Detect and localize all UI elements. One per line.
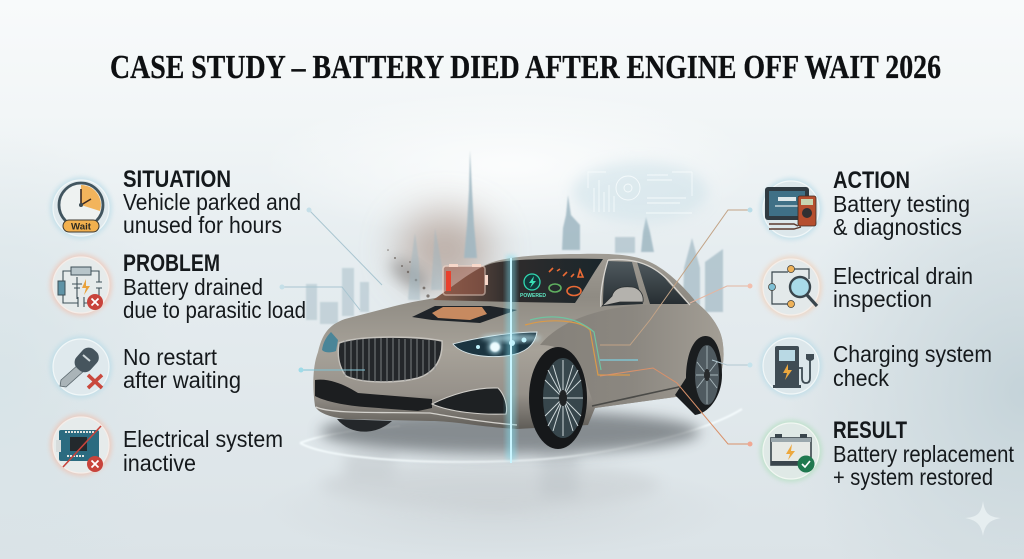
connector lines <box>280 208 752 446</box>
action text <box>833 167 970 240</box>
problem text: due to parasitic load <box>123 297 306 323</box>
action text: ACTION <box>833 167 910 194</box>
charging system text <box>833 341 992 391</box>
front wheel <box>529 347 587 449</box>
situation text <box>123 166 301 238</box>
lower left intake <box>315 380 432 411</box>
right headlight <box>453 332 537 357</box>
smoke and debris <box>386 212 491 298</box>
charging system text: check <box>833 365 889 391</box>
action text: Battery testing <box>833 191 970 217</box>
no restart text: No restart <box>123 344 218 370</box>
result text <box>833 417 1015 490</box>
situation: wait gauge icon <box>50 177 112 239</box>
situation text: Vehicle parked and <box>123 189 301 215</box>
action: diagnostics icon <box>760 178 822 240</box>
charging system text: Charging system <box>833 341 992 367</box>
vertical scan beam <box>481 255 541 463</box>
electrical drain inspection text <box>833 263 973 312</box>
sparkle mark <box>965 501 1001 536</box>
result text: + system restored <box>833 464 993 490</box>
side mirror <box>602 287 643 306</box>
problem text: Battery drained <box>123 274 263 300</box>
electrical drain inspection icon <box>760 256 822 318</box>
problem text: PROBLEM <box>123 250 220 277</box>
city skyline <box>306 150 723 324</box>
electrical drain inspection text: Electrical drain <box>833 263 973 289</box>
problem: circuit icon <box>50 254 112 316</box>
windshield display icons: POWERED <box>520 293 546 299</box>
front side window <box>603 261 643 306</box>
front lower shadow <box>337 419 392 432</box>
left headlight <box>322 332 338 352</box>
no restart text <box>123 344 241 393</box>
windshield display icons <box>520 268 583 299</box>
windshield <box>433 259 603 303</box>
result: new battery icon <box>760 420 822 482</box>
situation text: unused for hours <box>123 212 282 238</box>
rear side window <box>637 262 688 304</box>
situation text: SITUATION <box>123 166 231 193</box>
sill line <box>592 385 688 406</box>
charging system icon <box>760 335 822 397</box>
problem text <box>123 250 306 323</box>
no restart text: after waiting <box>123 367 241 393</box>
electrical inactive: circuit board icon <box>50 414 112 476</box>
car reflection <box>320 452 660 509</box>
result text: RESULT <box>833 417 907 444</box>
glowing floor ring <box>300 409 742 462</box>
situation: wait gauge icon: Wait <box>71 222 91 232</box>
battery wiring lines <box>525 317 638 375</box>
lower right intake <box>432 388 507 414</box>
electrical inactive text: Electrical system <box>123 426 283 452</box>
rear wheel <box>675 336 722 415</box>
hood battery bay <box>412 306 517 323</box>
car <box>313 254 724 449</box>
hologram dashboard panel <box>572 162 708 222</box>
bumper chrome strip <box>316 407 517 425</box>
car side panel <box>540 303 724 408</box>
grille <box>338 337 442 382</box>
car shadow <box>320 410 700 454</box>
low battery warning icon <box>443 264 488 295</box>
no restart: key icon <box>50 336 112 398</box>
car body <box>313 254 724 429</box>
action text: & diagnostics <box>833 214 962 240</box>
electrical inactive text: inactive <box>123 450 196 476</box>
electrical drain inspection text: inspection <box>833 286 932 312</box>
electrical inactive text <box>123 426 283 476</box>
